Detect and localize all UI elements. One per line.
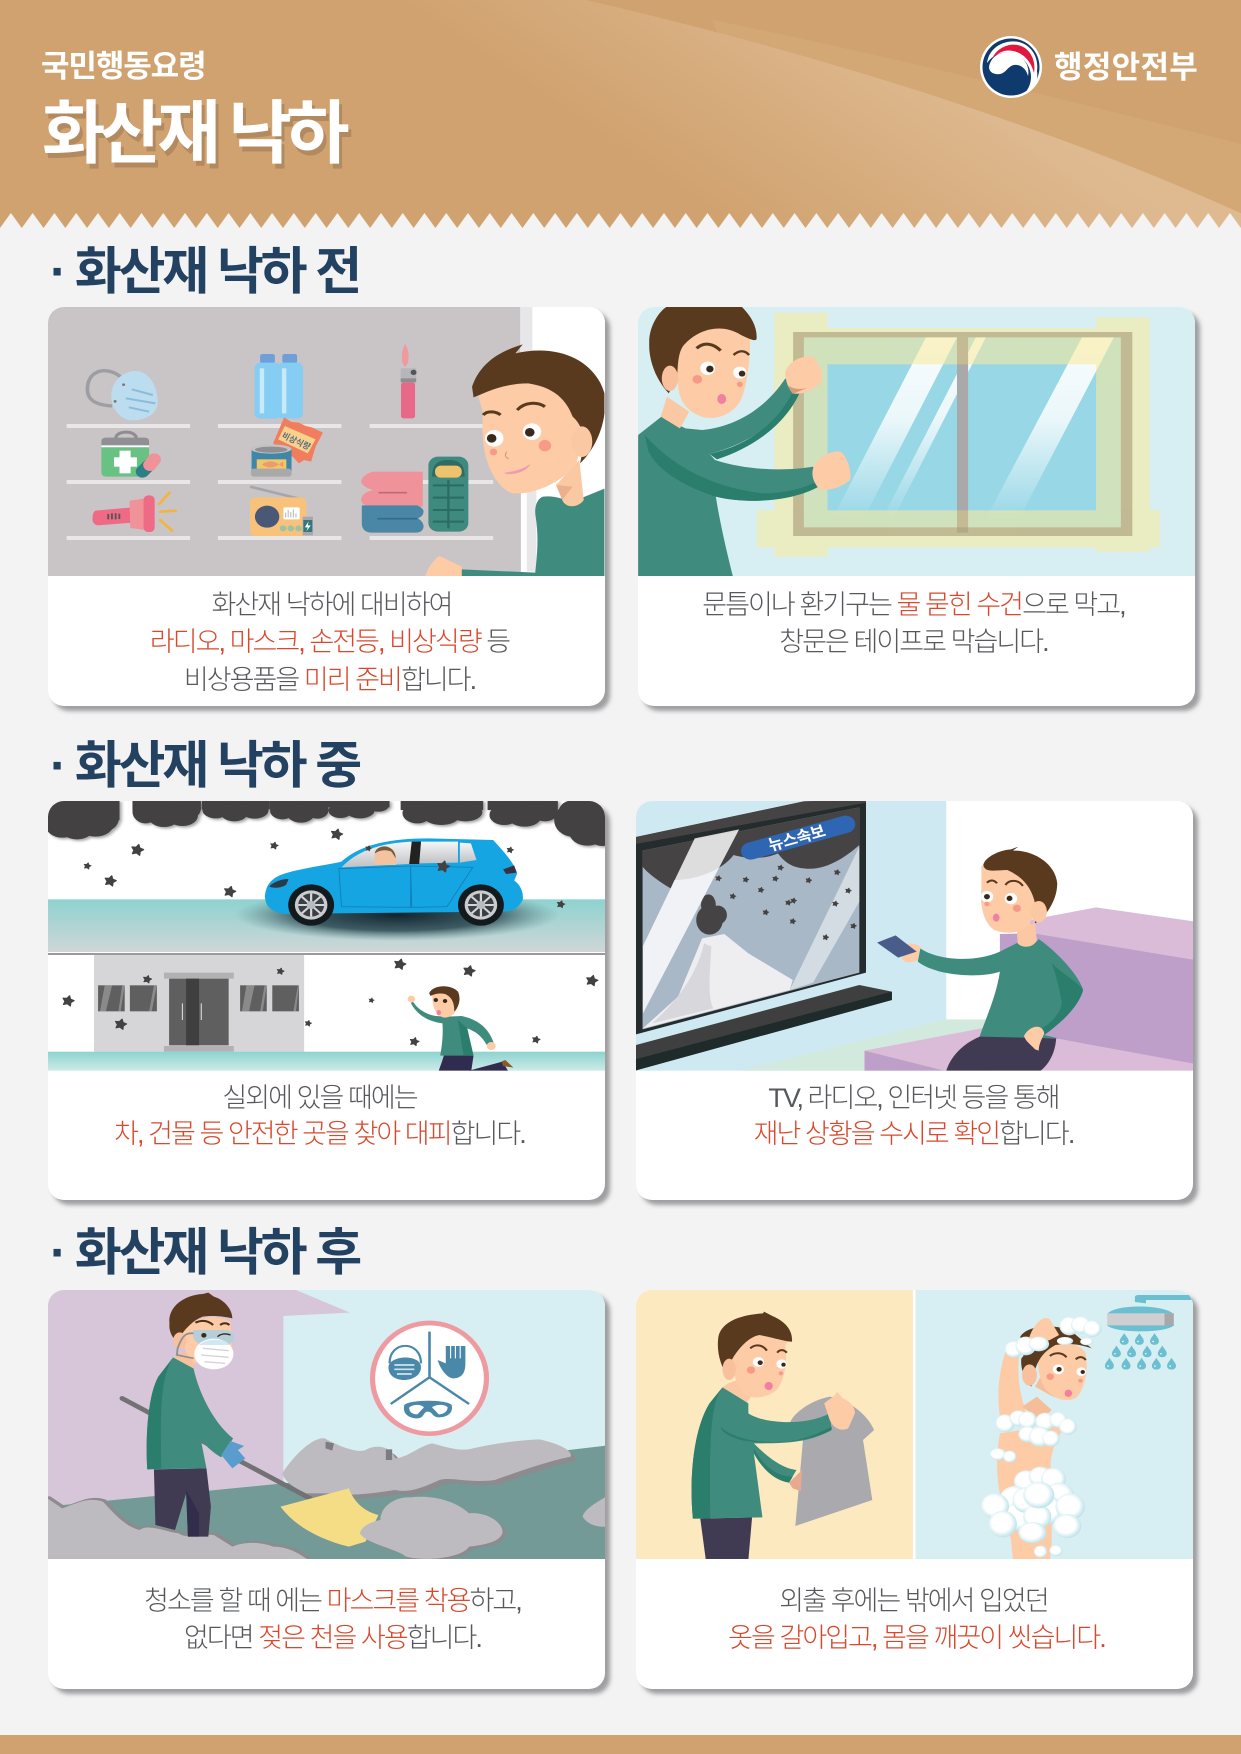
television with news broadcast bbox=[630, 800, 866, 1036]
caption: prepare supplies bbox=[150, 590, 510, 695]
caption: take shelter: 차, 건물 등 안전한 곳을 찾아 대피합니다. bbox=[114, 1119, 525, 1149]
footer band bbox=[0, 1735, 1241, 1754]
caption: seal the window: 창문은 테이프로 막습니다. bbox=[779, 627, 1048, 657]
caption: take shelter: 실외에 있을 때에는 bbox=[222, 1083, 417, 1113]
caption: prepare supplies: 화산재 낙하에 대비하여 bbox=[211, 590, 452, 620]
panel: take shelter bbox=[48, 801, 605, 1200]
caption: change and wash bbox=[728, 1586, 1105, 1653]
caption: seal the window: 문틈이나 환기구는 물 묻힌 수건으로 막고, bbox=[702, 590, 1125, 620]
panel: cleaning up bbox=[48, 1290, 605, 1689]
illustration: changing clothes and showering bbox=[636, 1290, 1193, 1559]
panel: watch the news bbox=[636, 801, 1193, 1200]
caption: watch the news bbox=[754, 1083, 1073, 1149]
character: man with remote bbox=[877, 847, 1083, 1071]
caption: seal the window bbox=[702, 590, 1125, 657]
panel: seal the window bbox=[638, 307, 1195, 706]
caption: cleaning up: 없다면 젖은 천을 사용합니다. bbox=[184, 1623, 481, 1653]
header eyebrow: 국민행동요령 bbox=[41, 49, 206, 84]
ash clouds bbox=[46, 799, 617, 846]
car bbox=[234, 838, 560, 941]
caption: prepare supplies: 라디오, 마스크, 손전등, 비상식량 등 bbox=[150, 627, 509, 657]
icon: lighter bbox=[401, 344, 417, 418]
building bbox=[94, 955, 304, 1052]
character: man changing clothes bbox=[692, 1312, 874, 1560]
illustration: man shoveling ash bbox=[48, 1290, 605, 1559]
caption: watch the news: 재난 상황을 수시로 확인합니다. bbox=[754, 1119, 1073, 1149]
caption: take shelter bbox=[114, 1083, 525, 1149]
heading: during ashfall: · 화산재 낙하 중 bbox=[50, 737, 359, 794]
government emblem bbox=[980, 36, 1042, 98]
illustration: man taping window bbox=[638, 307, 1195, 576]
icon: canned food and ration pack: 비상식량 bbox=[280, 430, 313, 452]
falling volcanic ash bbox=[61, 828, 599, 1046]
icon: first aid kit and pill bbox=[101, 432, 154, 477]
TV stand bbox=[630, 985, 892, 1072]
television with news broadcast: 뉴스속보 bbox=[766, 822, 828, 855]
character: man showering bbox=[997, 1318, 1092, 1560]
panel: prepare supplies bbox=[48, 307, 605, 706]
ministry name: 행정안전부 bbox=[1054, 50, 1198, 85]
window with tape bbox=[757, 313, 1160, 557]
illustration: ashfall on car and building bbox=[48, 801, 605, 1071]
illustration: man watching TV news bbox=[636, 801, 1193, 1071]
caption: prepare supplies: 비상용품을 미리 준비합니다. bbox=[184, 665, 475, 695]
icon: canned food and ration pack bbox=[251, 417, 323, 477]
character: man with mask and goggles bbox=[122, 1293, 503, 1559]
header banner bbox=[0, 0, 1241, 228]
character: man looking at supplies bbox=[425, 344, 604, 576]
caption: change and wash: 외출 후에는 밖에서 입었던 bbox=[779, 1586, 1048, 1616]
character: man closing window bbox=[638, 306, 851, 576]
icon: water bottles bbox=[255, 354, 303, 419]
main title: 화산재 낙하 bbox=[42, 95, 344, 172]
illustration: emergency supplies shelf bbox=[48, 307, 605, 576]
caption: cleaning up: 청소를 할 때 에는 마스크를 착용하고, bbox=[144, 1586, 521, 1616]
caption: watch the news: TV, 라디오, 인터넷 등을 통해 bbox=[768, 1083, 1059, 1113]
icon: dust mask bbox=[87, 371, 158, 420]
icon: flashlight bbox=[92, 493, 176, 532]
character: running man bbox=[408, 986, 513, 1071]
panel: change and wash bbox=[636, 1290, 1193, 1689]
sofa bbox=[865, 907, 1196, 1071]
icon: protective gear badge bbox=[373, 1323, 486, 1434]
caption: change and wash: 옷을 갈아입고, 몸을 깨끗이 씻습니다. bbox=[728, 1623, 1105, 1653]
ash piles bbox=[40, 1438, 606, 1561]
heading: after ashfall: · 화산재 낙하 후 bbox=[50, 1224, 359, 1281]
icon: shower head bbox=[1105, 1295, 1196, 1370]
icon: radio and battery bbox=[250, 487, 313, 536]
caption: cleaning up bbox=[144, 1586, 521, 1653]
heading: before ashfall: · 화산재 낙하 전 bbox=[50, 243, 359, 300]
soap bubbles bbox=[981, 1316, 1102, 1558]
icon: blankets and sleeping bag bbox=[361, 457, 468, 533]
